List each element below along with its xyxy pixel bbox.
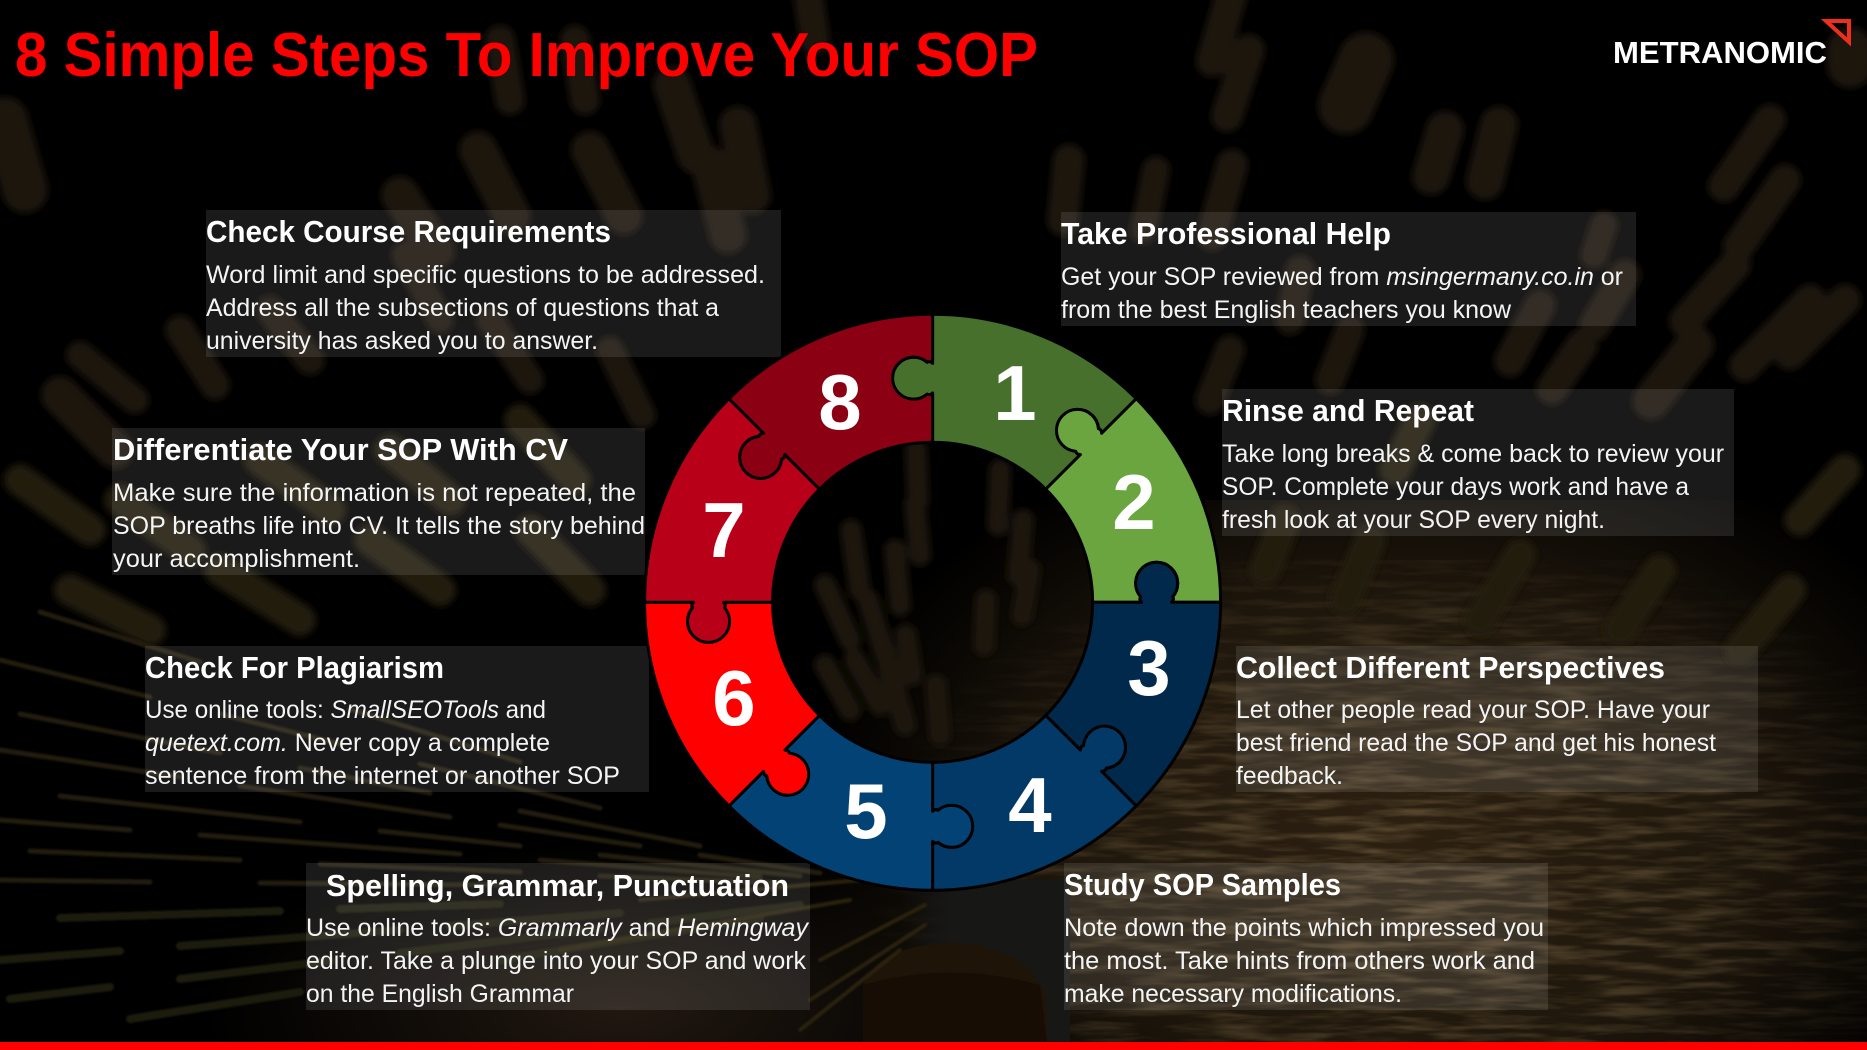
panel: step 5 spelling grammar punctuation	[306, 863, 810, 1010]
panel: step 8 check course requirements	[206, 210, 781, 357]
text: step 1: Get your SOP reviewed from msingermany.co.in or	[1061, 263, 1623, 291]
text: step 2	[1222, 440, 1724, 534]
heading: step 7: Differentiate Your SOP With CV	[113, 432, 568, 467]
puzzle piece 2	[984, 370, 1280, 666]
text: step 4: make necessary modifications.	[1064, 980, 1402, 1008]
number 5: 5	[844, 767, 888, 855]
text: step 3: best friend read the SOP and get his honest	[1236, 729, 1716, 757]
text: step 7: SOP breaths life into CV. It tells the story behind	[113, 512, 645, 540]
panel: step 7 differentiate your sop with cv	[112, 428, 645, 575]
text: step 6: sentence from the internet or another SOP	[145, 762, 620, 790]
text: step 6: quetext.com. Never copy a complete	[145, 729, 550, 757]
text: step 7: Make sure the information is not repeated, the	[113, 479, 636, 507]
text: step 6: Use online tools: SmallSEOTools and	[145, 696, 546, 724]
text: step 4: Note down the points which impressed you	[1064, 914, 1544, 942]
panel: step 1 take professional help	[1061, 212, 1636, 326]
number 3: 3	[1127, 624, 1171, 712]
title: 8 Simple Steps To Improve Your SOP	[15, 21, 1038, 90]
number 8: 8	[818, 358, 862, 446]
text: step 2: fresh look at your SOP every night.	[1222, 506, 1605, 534]
text: step 4: the most. Take hints from others work and	[1064, 947, 1535, 975]
number 4: 4	[1008, 761, 1052, 849]
heading: step 8: Check Course Requirements	[206, 214, 611, 249]
text: step 7: your accomplishment.	[113, 545, 360, 573]
heading: step 5: Spelling, Grammar, Punctuation	[326, 868, 789, 903]
heading: step 2: Rinse and Repeat	[1222, 393, 1474, 428]
heading: step 3: Collect Different Perspectives	[1236, 650, 1665, 685]
logo: Metranomic	[1613, 21, 1849, 70]
puzzle piece 6	[585, 538, 881, 834]
puzzle piece 5	[729, 715, 973, 890]
text: step 7	[113, 479, 645, 573]
puzzle piece 4	[869, 654, 1165, 950]
text: step 3: Let other people read your SOP. Have your	[1236, 696, 1710, 724]
puzzle piece 8	[701, 255, 997, 551]
number 2: 2	[1112, 458, 1156, 546]
logo: Metranomic: METRANOMIC	[1613, 35, 1827, 70]
text: step 5: editor. Take a plunge into your SOP and work	[306, 947, 806, 975]
puzzle piece 7	[645, 399, 819, 642]
heading: step 1: Take Professional Help	[1061, 216, 1391, 251]
panel: step 2 rinse and repeat	[1222, 389, 1734, 536]
text: step 3: feedback.	[1236, 762, 1343, 790]
panel: step 6 check for plagiarism	[145, 646, 649, 792]
text: step 8: university has asked you to answer.	[206, 327, 598, 355]
puzzle piece 1	[892, 314, 1136, 489]
text: step 8: Word limit and specific questions to be addressed.	[206, 261, 765, 289]
heading: step 4: Study SOP Samples	[1064, 867, 1341, 902]
text: step 6	[145, 696, 620, 790]
text: step 8	[206, 261, 765, 355]
chart: eight-piece puzzle ring	[585, 255, 1280, 950]
number 6: 6	[712, 654, 756, 742]
text: step 4	[1064, 914, 1544, 1008]
puzzle piece 3	[1046, 562, 1221, 806]
text: step 3	[1236, 696, 1716, 790]
number 1: 1	[993, 349, 1037, 437]
panel: step 3 collect different perspectives	[1236, 646, 1758, 792]
text: step 5: on the English Grammar	[306, 980, 574, 1008]
text: step 5	[306, 914, 809, 1008]
number 7: 7	[702, 486, 746, 574]
text: step 2: SOP. Complete your days work and have a	[1222, 473, 1689, 501]
text: step 1: from the best English teachers you know	[1061, 296, 1512, 324]
text: step 5: Use online tools: Grammarly and Hemingway	[306, 914, 809, 942]
text: step 1	[1061, 263, 1623, 324]
text: step 2: Take long breaks & come back to review your	[1222, 440, 1724, 468]
text: step 8: Address all the subsections of questions that a	[206, 294, 719, 322]
panel: step 4 study sop samples	[1064, 863, 1548, 1010]
bottom red bar	[0, 1042, 1867, 1050]
heading: step 6: Check For Plagiarism	[145, 650, 444, 685]
